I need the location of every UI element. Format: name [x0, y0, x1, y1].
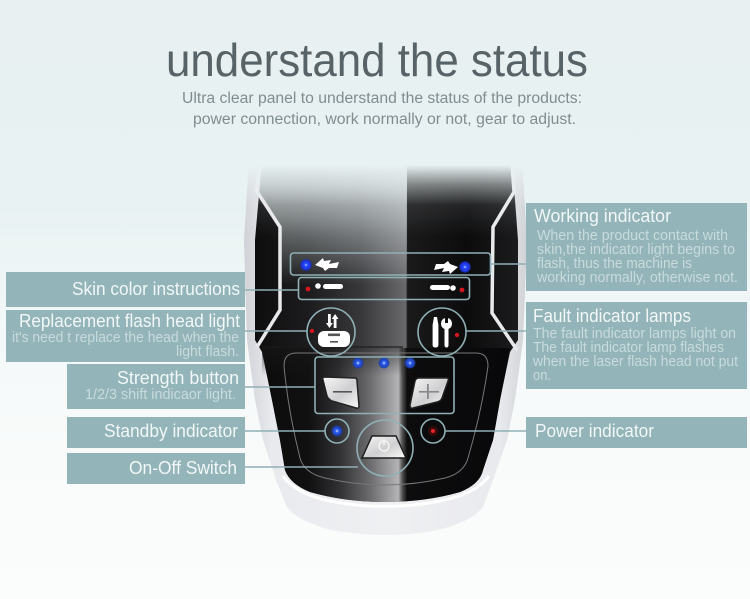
panel: working indicator: When the product contact with [537, 228, 728, 244]
panel: working indicator: Working indicator [534, 205, 671, 226]
icon: power led [428, 426, 438, 436]
icon: right skin red led [460, 288, 464, 292]
panel: skin color instructions [6, 272, 245, 307]
panel: working indicator: skin,the indicator light begins to [537, 242, 735, 258]
icon: minus button [323, 377, 359, 408]
panel: fault indicator lamps: The fault indicator lamps light on [533, 326, 736, 342]
title: understand the status [166, 34, 588, 86]
icon: red led flash head [310, 329, 314, 333]
panel: replacement flash head light [6, 310, 245, 362]
panel: working indicator [526, 203, 747, 291]
panel: skin color instructions: Skin color instructions [72, 278, 240, 299]
icon: red led tools [455, 333, 459, 337]
panel: working indicator: working normally, otherwise not. [536, 270, 738, 286]
icon: right working led [459, 261, 471, 273]
blend between upper and lower face [262, 346, 403, 376]
panel: fault indicator lamps: The fault indicator lamp flashes [533, 340, 724, 356]
icon: plus button [410, 378, 448, 408]
subtitle: Ultra clear panel to understand the status of the products: [182, 90, 582, 107]
icon: flash head replacement [318, 314, 350, 347]
icon: left working lightning arrow [315, 258, 339, 271]
icon: left skin red led [306, 287, 310, 291]
subtitle: power connection, work normally or not, gear to adjust. [193, 111, 576, 128]
lower glossy panel [262, 348, 510, 502]
panel: replacement flash head light: light flash. [176, 344, 239, 360]
panel: on-off switch: On-Off Switch [129, 457, 237, 478]
device shell [244, 160, 527, 535]
panel: strength button: 1/2/3 shift indicaor light. [85, 387, 236, 403]
panel: standby indicator [67, 417, 245, 448]
panel: fault indicator lamps: on. [533, 368, 551, 384]
panel: fault indicator lamps: Fault indicator lamps [533, 305, 691, 326]
panel: standby indicator: Standby indicator [104, 420, 238, 441]
left white side trim [256, 163, 280, 347]
icon: left working led [300, 259, 312, 271]
panel: fault indicator lamps: when the laser flash head not put [532, 354, 738, 370]
subtitle [182, 90, 582, 128]
icon: tools [433, 317, 452, 348]
button recess outline [284, 353, 488, 485]
panel: replacement flash head light: it's need t replace the head when the [12, 330, 239, 346]
panel: strength button: Strength button [117, 367, 239, 388]
icon: power button [362, 436, 406, 458]
right white side trim [492, 163, 517, 350]
chrome trim under face [283, 476, 489, 506]
panel: power indicator [526, 417, 747, 448]
indicator frames and leader lines [245, 253, 526, 476]
panel: on-off switch [67, 453, 245, 484]
icon: strength level leds [352, 357, 416, 369]
haze over left upper face [259, 168, 407, 280]
icon: standby led [331, 425, 343, 437]
panel: working indicator: flash, thus the machine is [537, 256, 692, 272]
device dark face [255, 160, 518, 502]
device illustration [244, 160, 527, 535]
panel: replacement flash head light: Replacement flash head light [19, 310, 240, 331]
panel: power indicator: Power indicator [535, 420, 654, 441]
icon: left skin tone symbol [315, 283, 343, 289]
icon: right skin tone symbol [430, 285, 456, 291]
icon: right working lightning arrow [434, 261, 458, 274]
panel: fault indicator lamps [526, 302, 747, 389]
panel: strength button [67, 364, 245, 409]
